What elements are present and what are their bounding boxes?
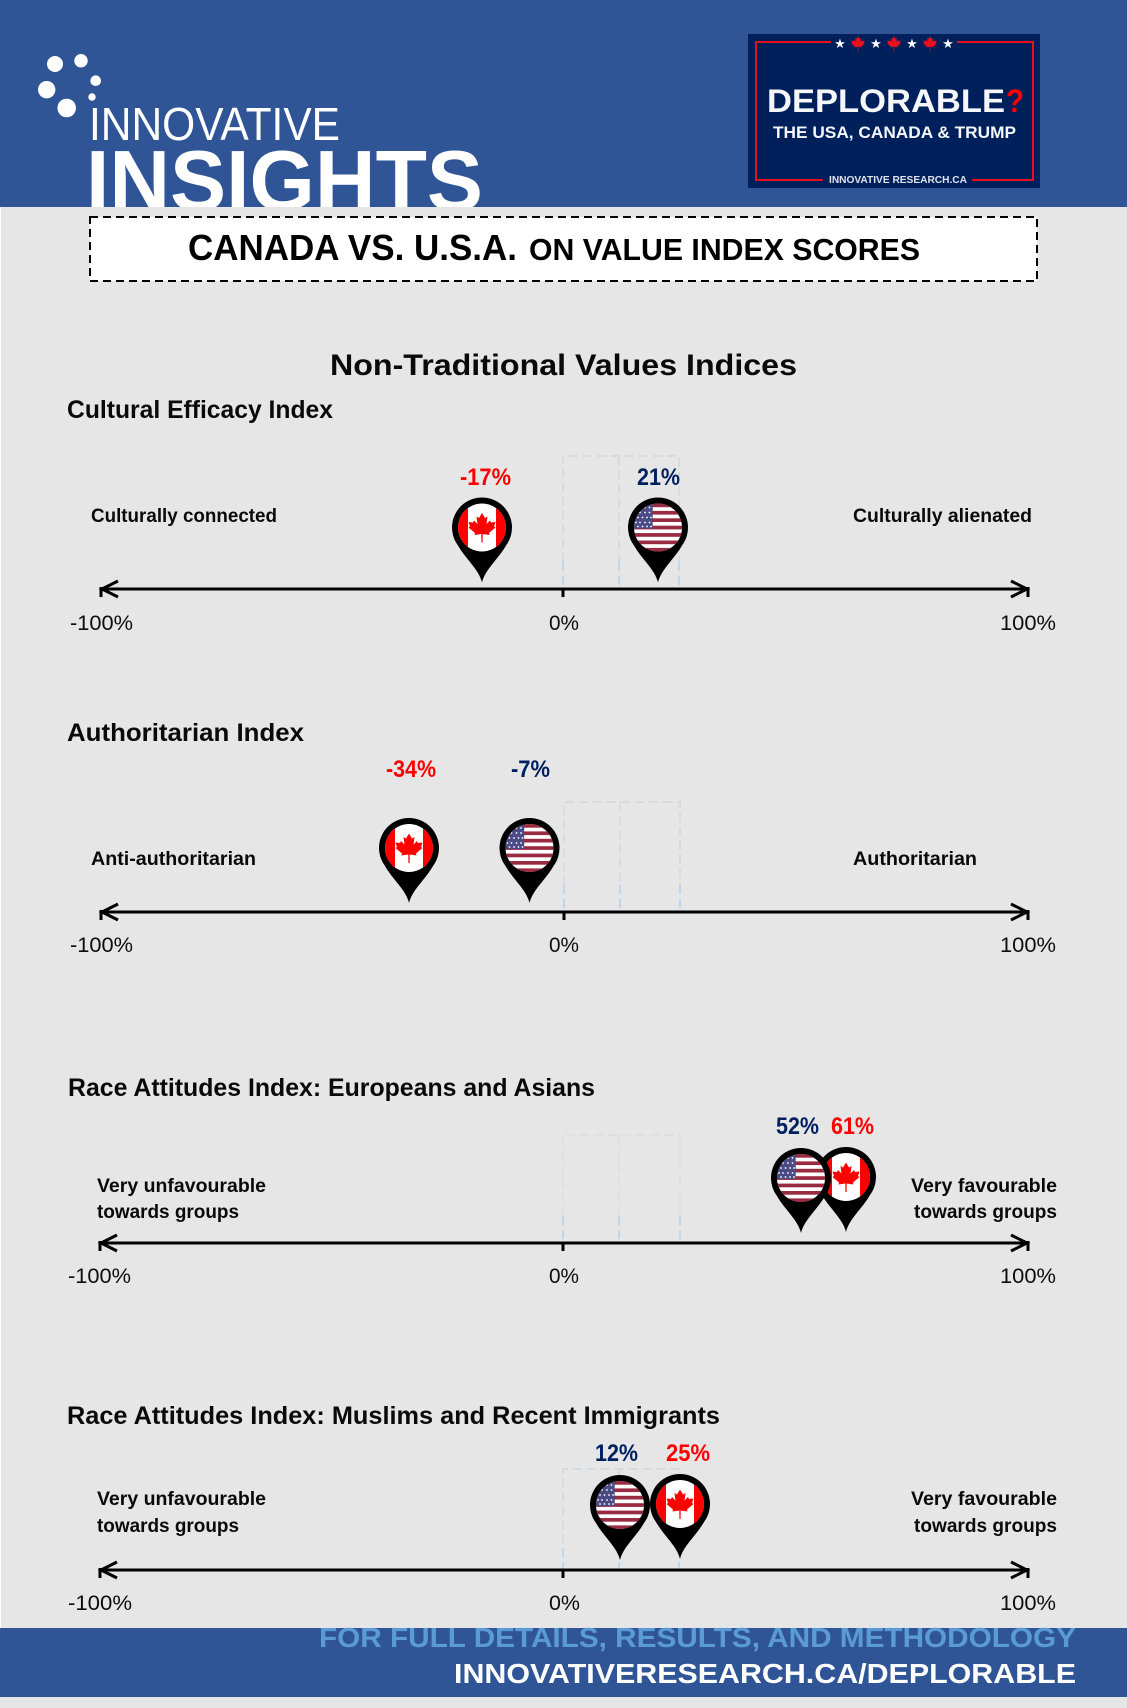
left page edge [0, 207, 1, 1628]
section heading: Non-Traditional Values Indices [330, 349, 797, 382]
panel heading: Race Attitudes Index: Muslims and Recent Immigrants [67, 1402, 720, 1430]
title box: ON VALUE INDEX SCORES [529, 232, 920, 267]
right pole label: Very favourable [911, 1489, 1057, 1510]
left pole label [97, 1176, 266, 1223]
badge: Deplorable?: INNOVATIVE RESEARCH.CA [829, 175, 967, 186]
footer call to action: FOR FULL DETAILS, RESULTS, AND METHODOLOGY [319, 1622, 1076, 1653]
axis labels: 0% [549, 1592, 580, 1615]
axis labels: 100% [1000, 934, 1056, 957]
axis labels [68, 1265, 1056, 1288]
axis labels: -100% [68, 1592, 132, 1615]
axis labels: -100% [68, 1265, 131, 1288]
value: Canada 61%: 61% [831, 1113, 874, 1140]
panel: Authoritarian Index [67, 719, 1056, 957]
axis labels: 100% [1000, 612, 1056, 635]
badge: Deplorable? [748, 34, 1040, 188]
panel heading: Authoritarian Index [67, 719, 304, 747]
axis labels: 0% [549, 1265, 579, 1288]
axis arrow [99, 1562, 1028, 1578]
value: Canada -17%: -17% [460, 464, 511, 491]
logo: Innovative Insights [38, 54, 480, 207]
right pole label [911, 1176, 1057, 1223]
title box: CANADA VS. U.S.A. [188, 227, 517, 268]
right pole label: Very favourable [911, 1176, 1057, 1197]
left pole label: Very unfavourable [97, 1489, 266, 1510]
value: USA 21%: 21% [637, 464, 680, 491]
pin: Canada [816, 1147, 876, 1232]
badge: Deplorable?: THE USA, CANADA & TRUMP [773, 124, 1016, 142]
value: Canada -34%: -34% [386, 756, 436, 783]
left pole label [97, 1489, 266, 1537]
pin: USA [771, 1148, 831, 1233]
pin: USA [628, 498, 688, 582]
badge: Deplorable?: DEPLORABLE [767, 83, 1005, 119]
header band [0, 0, 1127, 229]
axis labels: -100% [70, 612, 133, 635]
right pole label [911, 1489, 1057, 1537]
axis labels: 100% [1000, 1592, 1056, 1615]
title box [90, 217, 1037, 281]
left pole label: towards groups [97, 1516, 239, 1537]
badge: Deplorable?: ★ [906, 36, 918, 51]
axis arrow [99, 1235, 1028, 1251]
axis labels [68, 1592, 1056, 1615]
left pole label: Very unfavourable [97, 1176, 266, 1197]
value: USA 12%: 12% [595, 1440, 638, 1467]
badge: Deplorable?: ★ [834, 36, 846, 51]
pin: USA [500, 818, 560, 903]
value: USA -7%: -7% [511, 756, 550, 783]
logo: Innovative Insights: INNOVATIVE [89, 98, 340, 150]
badge: Deplorable?: ? [1006, 83, 1024, 119]
badge: Deplorable?: ★ [870, 36, 882, 51]
right pole label: towards groups [914, 1516, 1057, 1537]
left pole label: towards groups [97, 1202, 239, 1223]
pin: Canada [379, 818, 439, 903]
axis arrow [100, 581, 1028, 597]
footer band [0, 1622, 1127, 1697]
panel heading: Race Attitudes Index: Europeans and Asians [68, 1074, 595, 1102]
axis labels: 0% [549, 612, 579, 635]
badge: Deplorable?: ★ [942, 36, 954, 51]
pin: Canada [650, 1474, 710, 1559]
value: Canada 25%: 25% [666, 1440, 710, 1467]
right pole label: Authoritarian [853, 849, 977, 870]
right pole label: Culturally alienated [853, 506, 1032, 527]
panel: Race Attitudes Index, Muslims and Recent Immigrants [67, 1402, 1057, 1615]
footer link: INNOVATIVERESEARCH.CA/DEPLORABLE [454, 1658, 1076, 1689]
axis labels [70, 612, 1056, 635]
axis arrow [100, 904, 1028, 920]
panel heading: Cultural Efficacy Index [67, 396, 333, 424]
pin: USA [590, 1475, 650, 1560]
left pole label: Culturally connected [91, 506, 277, 527]
logo: Innovative Insights: INSIGHTS [86, 134, 483, 229]
pin: Canada [452, 498, 512, 582]
axis labels: -100% [70, 934, 133, 957]
panel: Cultural Efficacy Index [67, 396, 1056, 635]
axis labels: 0% [549, 934, 579, 957]
value: USA 52%: 52% [776, 1113, 819, 1140]
axis labels: 100% [1000, 1265, 1056, 1288]
panel: Race Attitudes Index, Europeans and Asians [68, 1074, 1057, 1288]
left pole label: Anti-authoritarian [91, 849, 256, 870]
axis labels [70, 934, 1056, 957]
right pole label: towards groups [914, 1202, 1057, 1223]
